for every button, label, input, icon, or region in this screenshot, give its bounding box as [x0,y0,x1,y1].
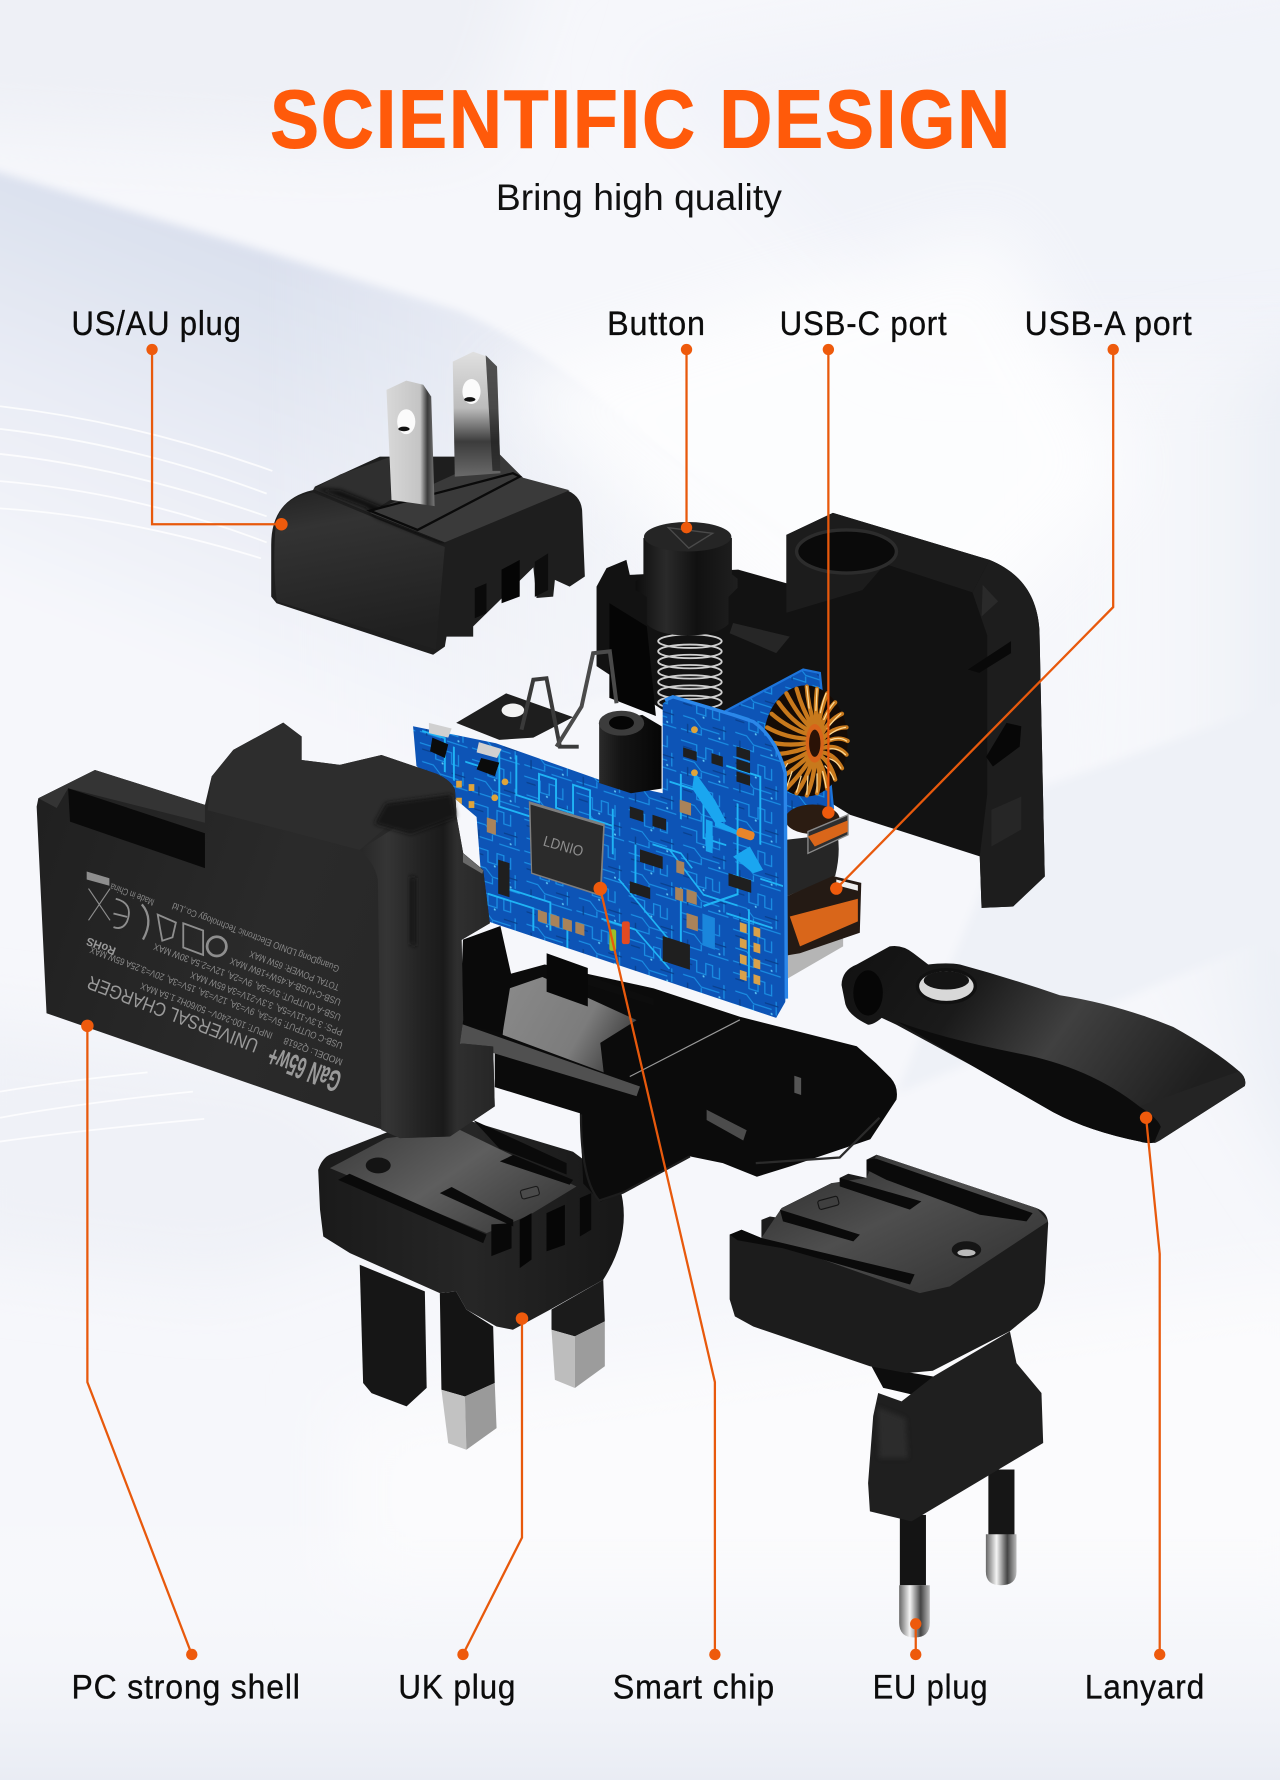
product label: PPS: 3.3V-11V=5A, 3.3V-21V=3A 65W MAX [189,969,344,1037]
product label: GuangDong LDNIO Electronic Technology Co.,Ltd [171,900,341,974]
product label: GaN 65w+ [263,1039,346,1098]
lanyard [842,946,1245,1143]
line: USB-C port [827,350,829,812]
label: US/AU plug: US/AU plug [71,305,242,343]
subtitle: Bring high quality [496,176,782,218]
line: smart chip [600,889,715,1654]
label: USB-C port: USB-C port [780,305,948,343]
line: EU plug [915,1624,917,1654]
product label: USB-C+USB-A:45W+18W MAX [228,954,343,1007]
metal clips [456,651,617,747]
line: UK plug [463,1319,522,1654]
smart chip [529,801,605,896]
product label: TOTAL POWER: 65W MAX [248,948,341,992]
product label [84,872,346,1098]
callout lines [87,350,1160,1654]
product label: RoHS [84,934,118,957]
product label: MODEL: Q2618 [282,1034,344,1067]
line: lanyard [1146,1118,1160,1654]
line: button [686,350,688,528]
EU plug [730,1155,1048,1637]
product label: INPUT: 100-240V~ 50/60Hz 1.5A MAX [139,980,274,1040]
copper coil [764,685,848,797]
product label: USB-C OUTPUT: 5V=3A, 9V=3A, 12V=3A, 15V=3A, 20V=3.25A 65W MAX [88,943,344,1051]
label: USB-A port: USB-A port [1025,305,1193,343]
main circuit board [413,668,786,1022]
USB-A port [786,876,861,955]
callout dots [81,344,1165,1660]
label: Smart chip: Smart chip [613,1669,775,1707]
label: PC strong shell: PC strong shell [71,1669,301,1707]
USB ports [785,805,861,979]
smart chip: LDNIO [541,834,585,861]
upper housing shell [597,513,1045,908]
USB-C port [808,815,848,853]
product label: UNIVERSAL CHARGER [85,971,262,1056]
label: UK plug: UK plug [398,1669,516,1707]
label: EU plug: EU plug [873,1669,988,1707]
plug prongs [386,352,500,506]
black spacer cylinder [599,711,662,793]
front shell [37,723,495,1138]
line: PC strong shell [87,1026,192,1654]
label: Button: Button [607,305,706,343]
US/AU plug [271,352,585,655]
UK plug [318,1118,624,1450]
label: Lanyard: Lanyard [1085,1669,1205,1707]
line: USB-A port [836,350,1113,889]
button with spring [635,522,738,709]
tray base [460,926,897,1202]
product label: Made in China [108,880,156,907]
line: US/AU plug [152,350,281,524]
title: SCIENTIFIC DESIGN [270,73,1012,166]
back circuit board [725,670,833,817]
product label: USB-A OUTPUT: 5V=3A, 9V=2A, 12V=2.5A 30W MAX [152,940,343,1022]
